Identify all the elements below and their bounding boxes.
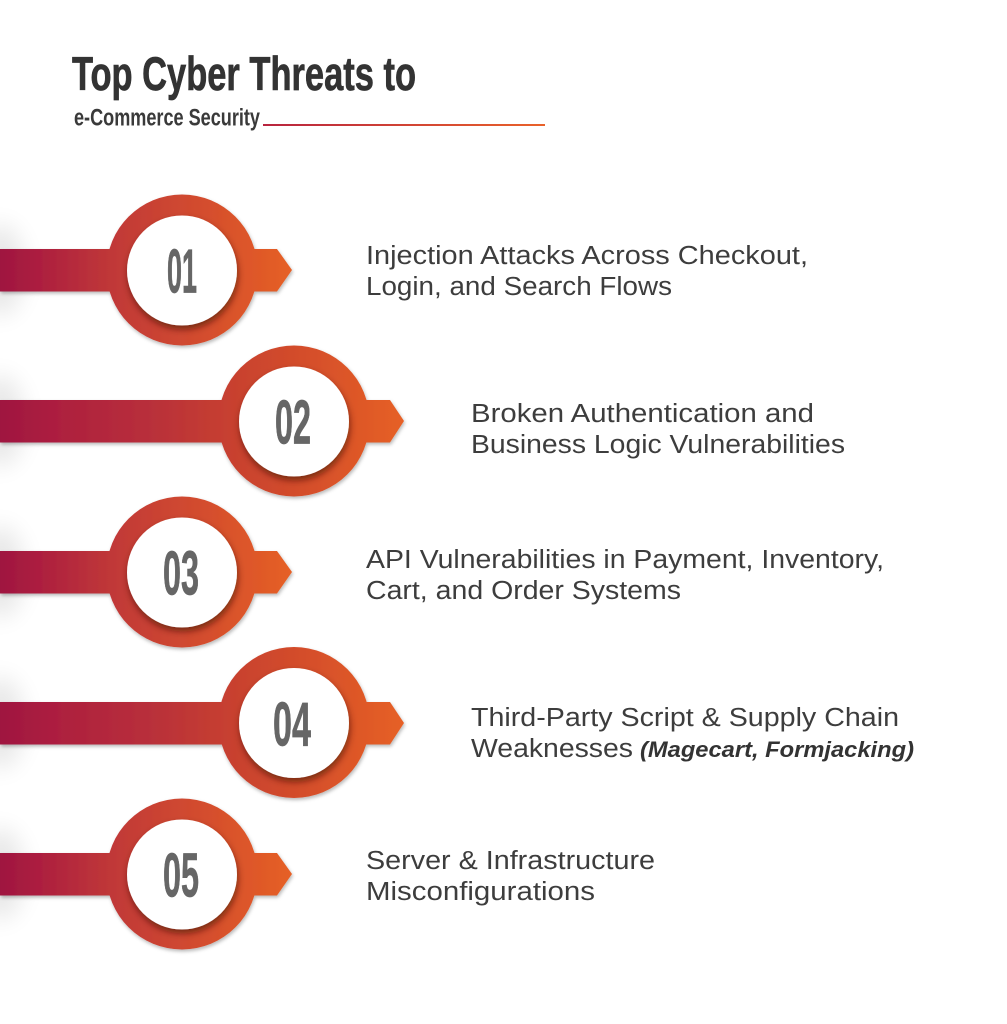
item 03 (0, 496, 884, 648)
title (72, 47, 545, 132)
text 05: Server & Infrastructure (366, 847, 655, 875)
subheading: e-Commerce Security: e-Commerce Security (74, 104, 260, 132)
text 02: Broken Authentication and (471, 400, 814, 428)
marker 01 (0, 194, 292, 346)
left edge shadow (0, 375, 24, 467)
text 04 (471, 704, 914, 763)
text 03 (366, 546, 884, 605)
left edge shadow (0, 224, 24, 316)
marker 05: 05 (163, 842, 199, 910)
text 01: Login, and Search Flows (366, 273, 672, 301)
marker 03: 03 (163, 540, 199, 608)
marker 01: 01 (167, 238, 197, 306)
marker 04 (0, 647, 404, 798)
text 04: (Magecart, Formjacking) (640, 737, 914, 762)
item 05 (0, 798, 655, 950)
left edge shadow (0, 677, 24, 769)
marker 02 (0, 346, 404, 496)
left edge shadow (0, 828, 24, 920)
text 03: Cart, and Order Systems (366, 577, 681, 605)
item 04 (0, 647, 914, 798)
marker 04: 04 (273, 690, 311, 760)
item 02 (0, 346, 845, 496)
text 02: Business Logic Vulnerabilities (471, 431, 845, 459)
text 01 (366, 242, 808, 301)
marker 02: 02 (275, 388, 311, 458)
text 03: API Vulnerabilities in Payment, Inventory, (366, 546, 884, 574)
text 04: Weaknesses (471, 735, 633, 763)
text 05: Misconfigurations (366, 878, 595, 906)
text 02 (471, 400, 845, 459)
text 05 (366, 847, 655, 906)
text 01: Injection Attacks Across Checkout, (366, 242, 808, 270)
item 01 (0, 194, 808, 346)
text 04: Third-Party Script & Supply Chain (471, 704, 899, 732)
heading: Top Cyber Threats to: Top Cyber Threats to (72, 47, 416, 100)
marker 03 (0, 496, 292, 648)
marker 05 (0, 798, 292, 950)
title underline (263, 124, 545, 126)
left edge shadow (0, 526, 24, 618)
